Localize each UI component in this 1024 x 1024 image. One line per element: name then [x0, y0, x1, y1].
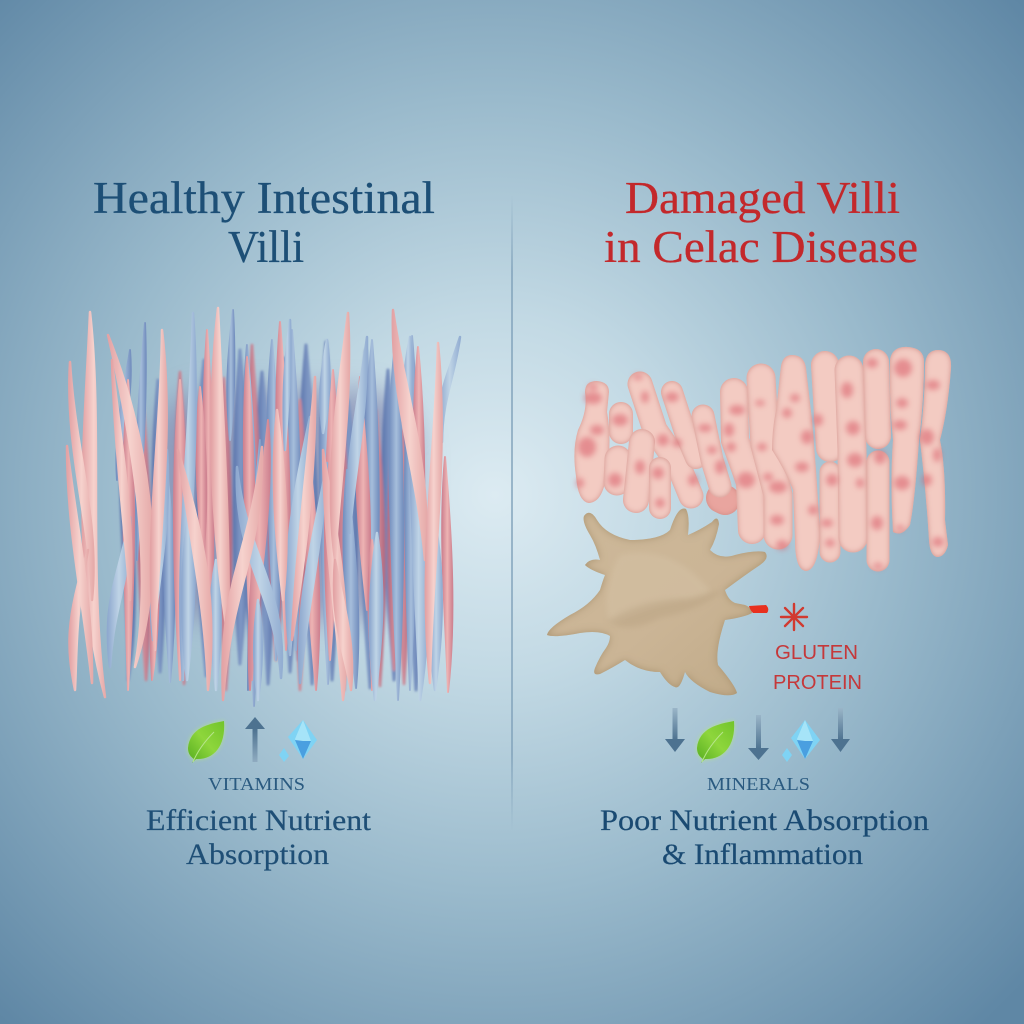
caption: poor nutrient absorption and inflammation: & Inflammation: [662, 838, 863, 871]
label: vitamins: VITAMINS: [208, 774, 305, 794]
label: gluten protein: [773, 642, 862, 694]
heading: Damaged Villi in Celac Disease: Damaged Villi: [625, 173, 900, 223]
heading: Damaged Villi in Celac Disease: in Celac Disease: [604, 222, 918, 272]
label: minerals: MINERALS: [707, 774, 810, 794]
caption: poor nutrient absorption and inflammation: [600, 804, 929, 871]
heading: Healthy Intestinal Villi: Healthy Intestinal: [93, 173, 435, 223]
heading: Healthy Intestinal Villi: Villi: [228, 222, 304, 272]
label: gluten protein: GLUTEN: [775, 642, 858, 664]
illustration: damaged villi: [574, 347, 951, 571]
divider line: [511, 195, 513, 831]
heading: Damaged Villi in Celac Disease: [604, 173, 918, 272]
illustration: healthy villi: [67, 308, 460, 706]
icons: healthy absorption: [188, 717, 317, 763]
caption: poor nutrient absorption and inflammation: Poor Nutrient Absorption: [600, 804, 929, 837]
caption: efficient nutrient absorption: [146, 804, 372, 871]
label: gluten protein: PROTEIN: [773, 672, 862, 694]
illustration: immune cell: [547, 508, 767, 695]
caption: efficient nutrient absorption: Absorption: [186, 838, 329, 871]
icons: reduced absorption: [665, 708, 850, 763]
gluten fragment: [749, 605, 768, 613]
caption: efficient nutrient absorption: Efficient Nutrient: [146, 804, 372, 837]
heading: Healthy Intestinal Villi: [93, 173, 435, 272]
icon: gluten asterisk: [781, 604, 807, 630]
